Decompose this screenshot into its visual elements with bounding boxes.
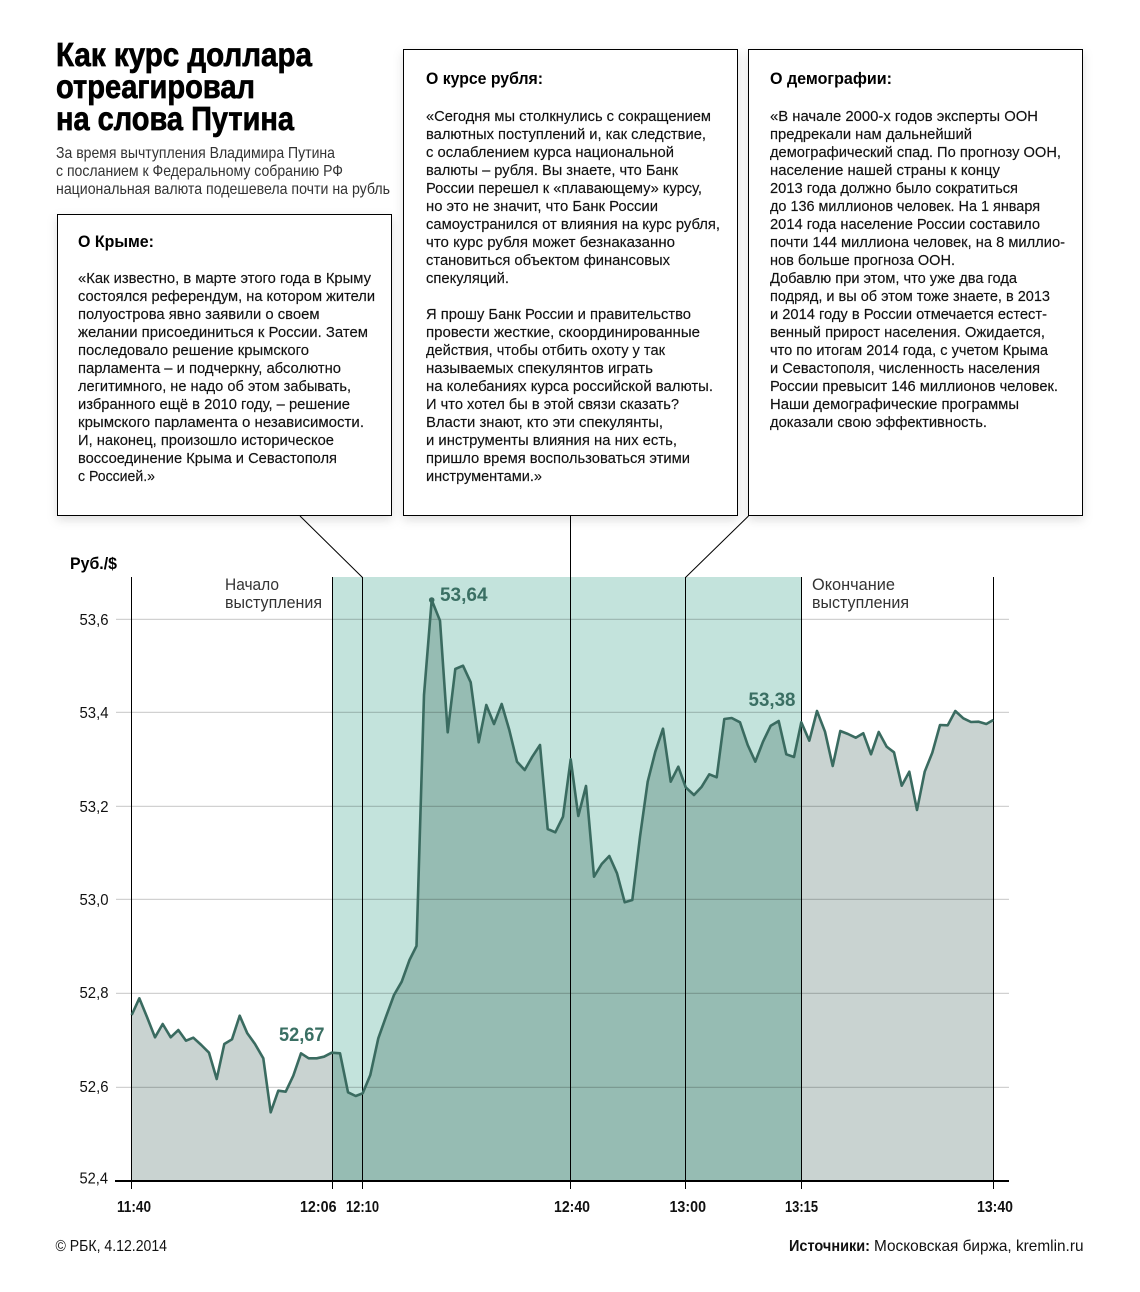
quote text: население нашей страны к концу — [770, 162, 1000, 179]
quote text: венный прирост населения. Ожидается, — [770, 324, 1045, 341]
y axis labels: 53,6 — [80, 612, 109, 629]
quote text: России перешел к «плавающему» курсу, — [426, 180, 702, 197]
quote text: И, наконец, произошло историческое — [78, 432, 334, 449]
quote text: Добавлю при этом, что уже два года — [770, 270, 1018, 287]
quote text: «Как известно, в марте этого года в Крыму — [78, 270, 371, 287]
x axis line — [115, 1180, 1009, 1182]
x axis labels: 13:40 — [977, 1199, 1013, 1216]
value label: end: 53,38 — [748, 690, 796, 711]
panel: Crimea quote — [58, 214, 392, 516]
quote text: И что хотел бы в этой связи сказать? — [426, 396, 679, 413]
speech end label: Окончание — [812, 575, 895, 594]
y axis labels: 52,8 — [80, 985, 109, 1002]
y axis labels: 52,4 — [80, 1170, 108, 1188]
quote text: что по итогам 2014 года, с учетом Крыма — [770, 342, 1049, 359]
x axis labels: 12:10 — [346, 1199, 379, 1216]
area under the rate line, outside the speech — [132, 600, 993, 1181]
title: отреагировал — [56, 68, 255, 105]
subtitle: с посланием к Федеральному собранию РФ — [56, 163, 343, 180]
y axis labels: 53,0 — [80, 892, 109, 909]
quote text: 2014 года население России составило — [770, 216, 1040, 233]
panel box — [748, 50, 1082, 516]
footer: copyright: © РБК, 4.12.2014 — [56, 1238, 167, 1255]
quote text: на колебаниях курса российской валюты. — [426, 378, 713, 395]
quote text: «В начале 2000-х годов эксперты ООН — [770, 108, 1038, 125]
panel heading: О демографии: — [770, 69, 892, 88]
value label: peak: 53,64 — [440, 585, 488, 606]
subtitle — [56, 145, 390, 198]
title — [56, 36, 313, 137]
quote text — [770, 108, 1065, 431]
panel heading: О курсе рубля: — [426, 69, 543, 88]
quote text: состоялся референдум, на котором жители — [78, 288, 375, 305]
chart: dollar rate during the speech — [70, 516, 1013, 1216]
quote text: валюты – рубля. Вы знаете, что Банк — [426, 162, 678, 179]
quote text: избранного ещё в 2010 году, – решение — [78, 396, 350, 413]
footer: sources: Источники: — [789, 1238, 870, 1255]
quote text: и 2014 году в России отмечается естест- — [770, 306, 1047, 323]
quote text: Власти знают, кто эти спекулянты, — [426, 414, 663, 431]
quote text: но это не значит, что Банк России — [426, 198, 658, 215]
x axis labels: 12:40 — [554, 1199, 590, 1216]
quote text: 2013 года должно было сократиться — [770, 180, 1018, 197]
quote text: воссоединение Крыма и Севастополя — [78, 450, 337, 467]
panel box — [404, 50, 738, 516]
y axis labels: 53,2 — [80, 799, 109, 816]
footer: sources — [789, 1238, 1084, 1255]
quote text: инструментами.» — [426, 468, 542, 485]
rate line — [132, 600, 993, 1112]
x axis labels: 12:06 — [300, 1199, 337, 1216]
title: Как курс доллара — [56, 36, 313, 73]
speech start label — [225, 575, 322, 612]
panel: ruble rate quote — [404, 50, 738, 516]
quote text: становиться объектом финансовых — [426, 252, 670, 269]
quote text — [78, 270, 375, 485]
quote text: Наши демографические программы — [770, 396, 1019, 413]
x axis labels: 11:40 — [117, 1199, 151, 1216]
quote text: валютных поступлений и, как следствие, — [426, 126, 706, 143]
y axis labels: 52,6 — [80, 1079, 109, 1096]
quote text: нов больше прогноза ООН. — [770, 252, 955, 269]
quote text: легитимного, не надо об этом забывать, — [78, 378, 351, 395]
y axis labels — [80, 612, 109, 1188]
quote text: провести жесткие, скоординированные — [426, 324, 700, 341]
area under the rate line, during the speech — [333, 606, 801, 1180]
speech end label: выступления — [812, 593, 909, 612]
quote text: с ослаблением курса национальной — [426, 144, 674, 161]
y axis title: Руб./$ — [70, 554, 118, 573]
quote text: что курс рубля может безнаказанно — [426, 234, 675, 251]
subtitle: За время вычтупления Владимира Путина — [56, 145, 335, 162]
panel: demography quote — [748, 50, 1082, 516]
peak marker — [429, 597, 435, 603]
quote text: «Сегодня мы столкнулись с сокращением — [426, 108, 711, 125]
speech start label: выступления — [225, 593, 322, 612]
quote text: почти 144 миллиона человек, на 8 миллио- — [770, 234, 1065, 251]
quote text: демографический спад. По прогнозу ООН, — [770, 144, 1061, 161]
footer: sources: Московская биржа, kremlin.ru — [874, 1238, 1084, 1255]
panel box — [58, 214, 392, 516]
quote text: доказали свою эффективность. — [770, 414, 987, 431]
quote text: действия, чтобы отбить охоту у так — [426, 342, 665, 359]
speech start label: Начало — [225, 575, 279, 594]
speech period band — [332, 577, 802, 1181]
quote text: последовало решение крымского — [78, 342, 309, 359]
quote text: спекуляций. — [426, 270, 509, 287]
quote text: предрекали нам дальнейший — [770, 126, 972, 143]
x axis labels: 13:00 — [670, 1199, 706, 1216]
quote text: самоустранился от влияния на курс рубля, — [426, 216, 720, 233]
title: на слова Путина — [56, 100, 295, 137]
speech end label — [812, 575, 909, 612]
x axis labels: 13:15 — [785, 1199, 818, 1216]
quote text: желании присоединиться к России. Затем — [78, 324, 368, 341]
quote text: крымского парламента о независимости. — [78, 414, 364, 431]
quote text — [426, 108, 720, 485]
quote text: подряд, и вы об этом тоже знаете, в 2013 — [770, 288, 1050, 305]
quote text: полуострова явно заявили о своем — [78, 306, 320, 323]
value label: start: 52,67 — [279, 1025, 324, 1046]
panel heading: О Крыме: — [78, 232, 154, 251]
quote text: и инструменты влияния на них есть, — [426, 432, 677, 449]
x axis labels — [117, 1199, 1013, 1216]
quote text: и Севастополя, численность населения — [770, 360, 1040, 377]
quote text: парламента – и подчеркну, абсолютно — [78, 360, 341, 377]
subtitle: национальная валюта подешевела почти на рубль — [56, 181, 390, 198]
y axis labels: 53,4 — [80, 705, 109, 722]
quote text: до 136 миллионов человек. На 1 января — [770, 198, 1040, 215]
quote text: России превысит 146 миллионов человек. — [770, 378, 1058, 395]
quote text: называемых спекулянтов играть — [426, 360, 653, 377]
quote text: пришло время воспользоваться этими — [426, 450, 690, 467]
quote text: с Россией.» — [78, 468, 155, 485]
quote text: Я прошу Банк России и правительство — [426, 306, 691, 323]
